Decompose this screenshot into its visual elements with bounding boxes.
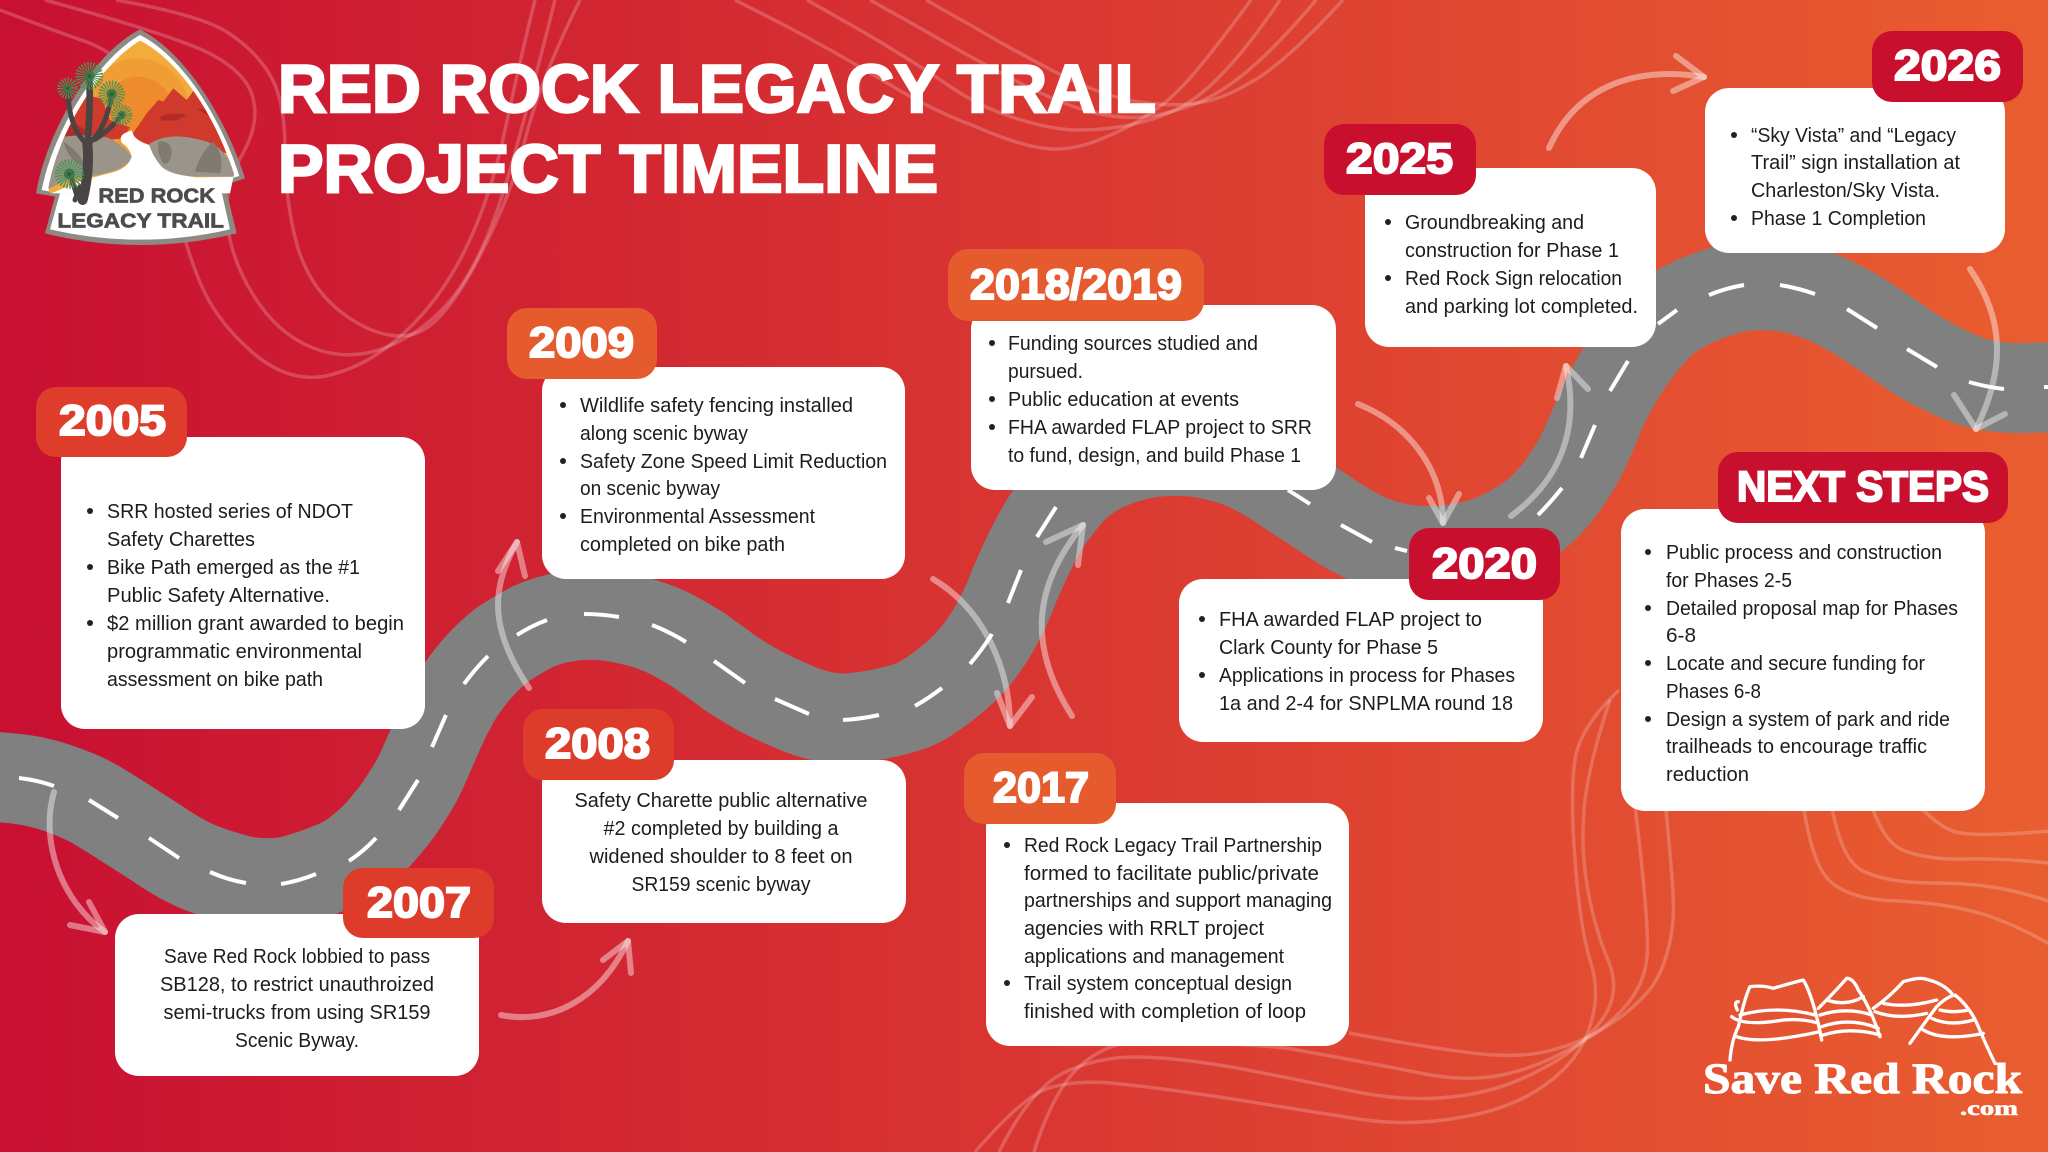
panel: 2017: Red Rock Legacy Trail Partnership: [1024, 834, 1322, 857]
panel: 2007: [115, 868, 494, 1076]
logo: Save Red Rock: Save Red Rock: [1703, 1056, 2022, 1103]
panel: 2008: Safety Charette public alternative: [574, 789, 868, 812]
panel: 2005: Bike Path emerged as the #1: [107, 556, 360, 579]
panel: 2026: Charleston/Sky Vista.: [1751, 179, 1940, 202]
logo: Red Rock Legacy Trail badge: RED ROCK: [98, 185, 215, 208]
panel: 2018/2019: [948, 249, 1336, 490]
panel: next steps: Phases 6-8: [1666, 680, 1761, 703]
panel: 2026: 2026: [1894, 42, 2001, 90]
title: PROJECT TIMELINE: [278, 131, 938, 207]
panel: 2005: [36, 387, 425, 729]
arrow: 2025 to 2026: [1549, 56, 1704, 148]
logo: Save Red Rock: .com: [1960, 1098, 2018, 1120]
arrow: 2007 to 2008: [501, 941, 631, 1017]
panel: 2025: and parking lot completed.: [1405, 295, 1638, 318]
panel: 2018/2019: Public education at events: [1008, 388, 1239, 411]
panel: 2017: partnerships and support managing: [1024, 889, 1332, 912]
panel: 2020: [1179, 528, 1560, 742]
logo: Red Rock Legacy Trail badge: [36, 29, 245, 245]
panel: 2018/2019: Funding sources studied and: [1008, 332, 1258, 355]
panel: 2005: assessment on bike path: [107, 668, 323, 691]
arrow: 2020 to 2025: [1511, 366, 1588, 516]
panel: 2005: Public Safety Alternative.: [107, 584, 330, 607]
panel: 2009: 2009: [529, 319, 634, 367]
panel: 2018/2019: pursued.: [1008, 360, 1083, 383]
arrow: 2018/2019 to 2020: [1358, 404, 1459, 523]
panel: 2020: Applications in process for Phases: [1219, 664, 1515, 687]
panel: 2025: 2025: [1346, 135, 1453, 183]
panel: 2017: agencies with RRLT project: [1024, 917, 1264, 940]
panel: 2020: Clark County for Phase 5: [1219, 636, 1438, 659]
panel: 2008: #2 completed by building a: [604, 817, 839, 840]
arrow: 2005 to 2007: [50, 792, 105, 932]
title: [278, 51, 1156, 207]
panel: 2007: Save Red Rock lobbied to pass: [164, 945, 430, 968]
panel: 2017: applications and management: [1024, 945, 1284, 968]
panel: 2007: semi-trucks from using SR159: [164, 1001, 430, 1024]
logo: Save Red Rock: [1703, 978, 2022, 1120]
panel: 2017: 2017: [993, 764, 1089, 812]
panel: 2007: Scenic Byway.: [235, 1029, 359, 1052]
panel: 2026: Phase 1 Completion: [1751, 207, 1926, 230]
panel: 2005: 2005: [59, 397, 166, 445]
panel: 2017: Trail system conceptual design: [1024, 972, 1292, 995]
panel: 2017: formed to facilitate public/private: [1024, 862, 1319, 885]
panel: 2025: Red Rock Sign relocation: [1405, 267, 1622, 290]
panel: 2025: construction for Phase 1: [1405, 239, 1619, 262]
panel: 2008: widened shoulder to 8 feet on: [589, 845, 852, 868]
panel: 2009: along scenic byway: [580, 422, 749, 445]
panel: next steps: reduction: [1666, 763, 1749, 786]
panel: next steps: [1621, 452, 2008, 811]
panel: 2009: completed on bike path: [580, 533, 785, 556]
panel: 2009: Environmental Assessment: [580, 505, 815, 528]
panel: 2026: “Sky Vista” and “Legacy: [1751, 124, 1957, 147]
panel: 2005: programmatic environmental: [107, 640, 362, 663]
panel: 2009: Safety Zone Speed Limit Reduction: [580, 450, 887, 473]
panel: 2018/2019: 2018/2019: [970, 261, 1182, 309]
arrow: 2009 to 2017: [933, 579, 1032, 726]
panel: 2020: 1a and 2-4 for SNPLMA round 18: [1219, 692, 1513, 715]
panel: 2017: finished with completion of loop: [1024, 1000, 1306, 1023]
panel: next steps: for Phases 2-5: [1666, 569, 1792, 592]
panel: 2008: 2008: [545, 720, 650, 768]
logo: Red Rock Legacy Trail badge: LEGACY TRAIL: [57, 209, 224, 232]
title: RED ROCK LEGACY TRAIL: [278, 51, 1156, 127]
winding road: [0, 285, 2048, 884]
panel: 2008: [523, 709, 906, 923]
panel: 2026: Trail” sign installation at: [1751, 151, 1960, 174]
panel: next steps: Design a system of park and ride: [1666, 708, 1950, 731]
panel: 2025: Groundbreaking and: [1405, 211, 1584, 234]
panel: 2009: Wildlife safety fencing installed: [580, 394, 853, 417]
panel: 2026: [1705, 31, 2023, 253]
panel: 2018/2019: to fund, design, and build Phase 1: [1008, 444, 1301, 467]
panel: 2020: 2020: [1432, 540, 1537, 588]
panel: next steps: Locate and secure funding for: [1666, 652, 1925, 675]
panel: next steps: 6-8: [1666, 624, 1696, 647]
panel: next steps: trailheads to encourage traffic: [1666, 735, 1927, 758]
arrow: 2008 to 2009: [498, 542, 529, 688]
panel: next steps: NEXT STEPS: [1737, 463, 1989, 511]
panel: 2005: SRR hosted series of NDOT: [107, 500, 353, 523]
panel: 2008: SR159 scenic byway: [632, 873, 811, 896]
panel: 2020: FHA awarded FLAP project to: [1219, 608, 1482, 631]
arrow: 2017 to 2018/2019: [1042, 525, 1083, 716]
panel: 2009: on scenic byway: [580, 477, 721, 500]
panel: next steps: Public process and construction: [1666, 541, 1942, 564]
panel: 2018/2019: FHA awarded FLAP project to SRR: [1008, 416, 1312, 439]
arrow: 2026 to next steps: [1954, 269, 2005, 429]
panel: 2009: [507, 308, 905, 579]
panel: 2025: [1324, 124, 1656, 347]
panel: next steps: Detailed proposal map for Phases: [1666, 597, 1958, 620]
panel: 2007: 2007: [367, 879, 471, 927]
panel: 2007: SB128, to restrict unauthroized: [160, 973, 434, 996]
panel: 2005: Safety Charettes: [107, 528, 255, 551]
panel: 2017: [964, 753, 1349, 1046]
panel: 2005: $2 million grant awarded to begin: [107, 612, 404, 635]
